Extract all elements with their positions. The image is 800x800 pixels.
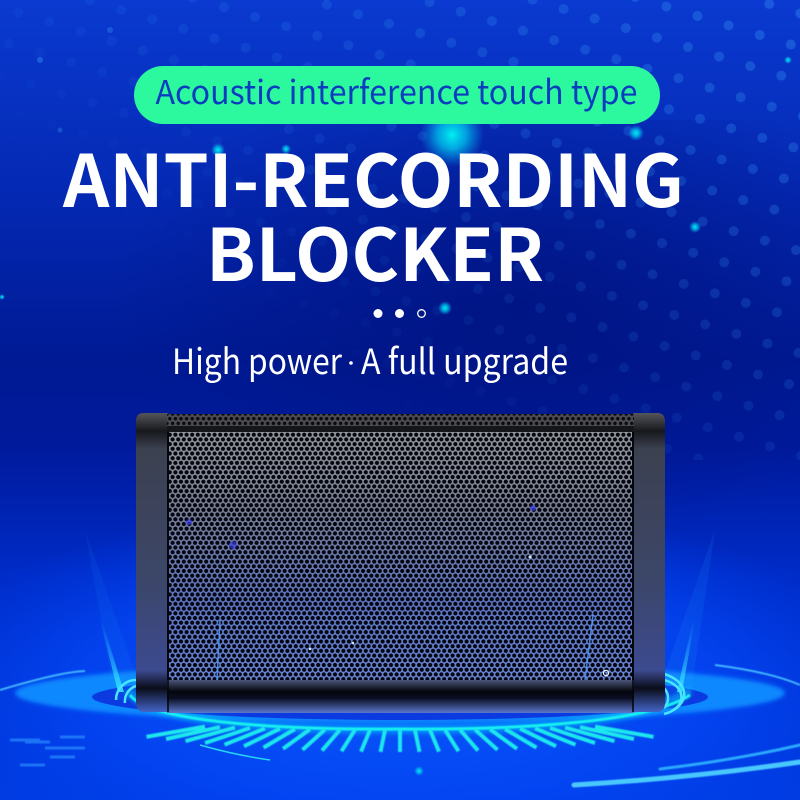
- subtitle: A full upgrade: [361, 334, 568, 385]
- speaker right end cap: [633, 413, 665, 712]
- speaker mesh grille: [167, 432, 634, 680]
- light rays: [85, 530, 715, 700]
- subtitle: High power: [172, 334, 342, 385]
- title: [62, 123, 684, 302]
- pagination dots: [374, 309, 425, 318]
- title: ANTI-RECORDING: [62, 123, 684, 228]
- cyan sound ring with radial ticks: [116, 674, 690, 760]
- subtitle: [172, 334, 568, 385]
- speaker left end cap: [136, 413, 168, 712]
- speaker bottom bar: [167, 680, 634, 713]
- badge: acoustic interference: Acoustic interference touch type: [156, 66, 638, 114]
- speaker product: [136, 413, 665, 713]
- speaker top band: [167, 414, 634, 432]
- glowing particles: [0, 27, 792, 315]
- floor halo rings: [0, 663, 800, 776]
- light streaks lower right: [574, 745, 800, 785]
- title: BLOCKER: [206, 197, 544, 302]
